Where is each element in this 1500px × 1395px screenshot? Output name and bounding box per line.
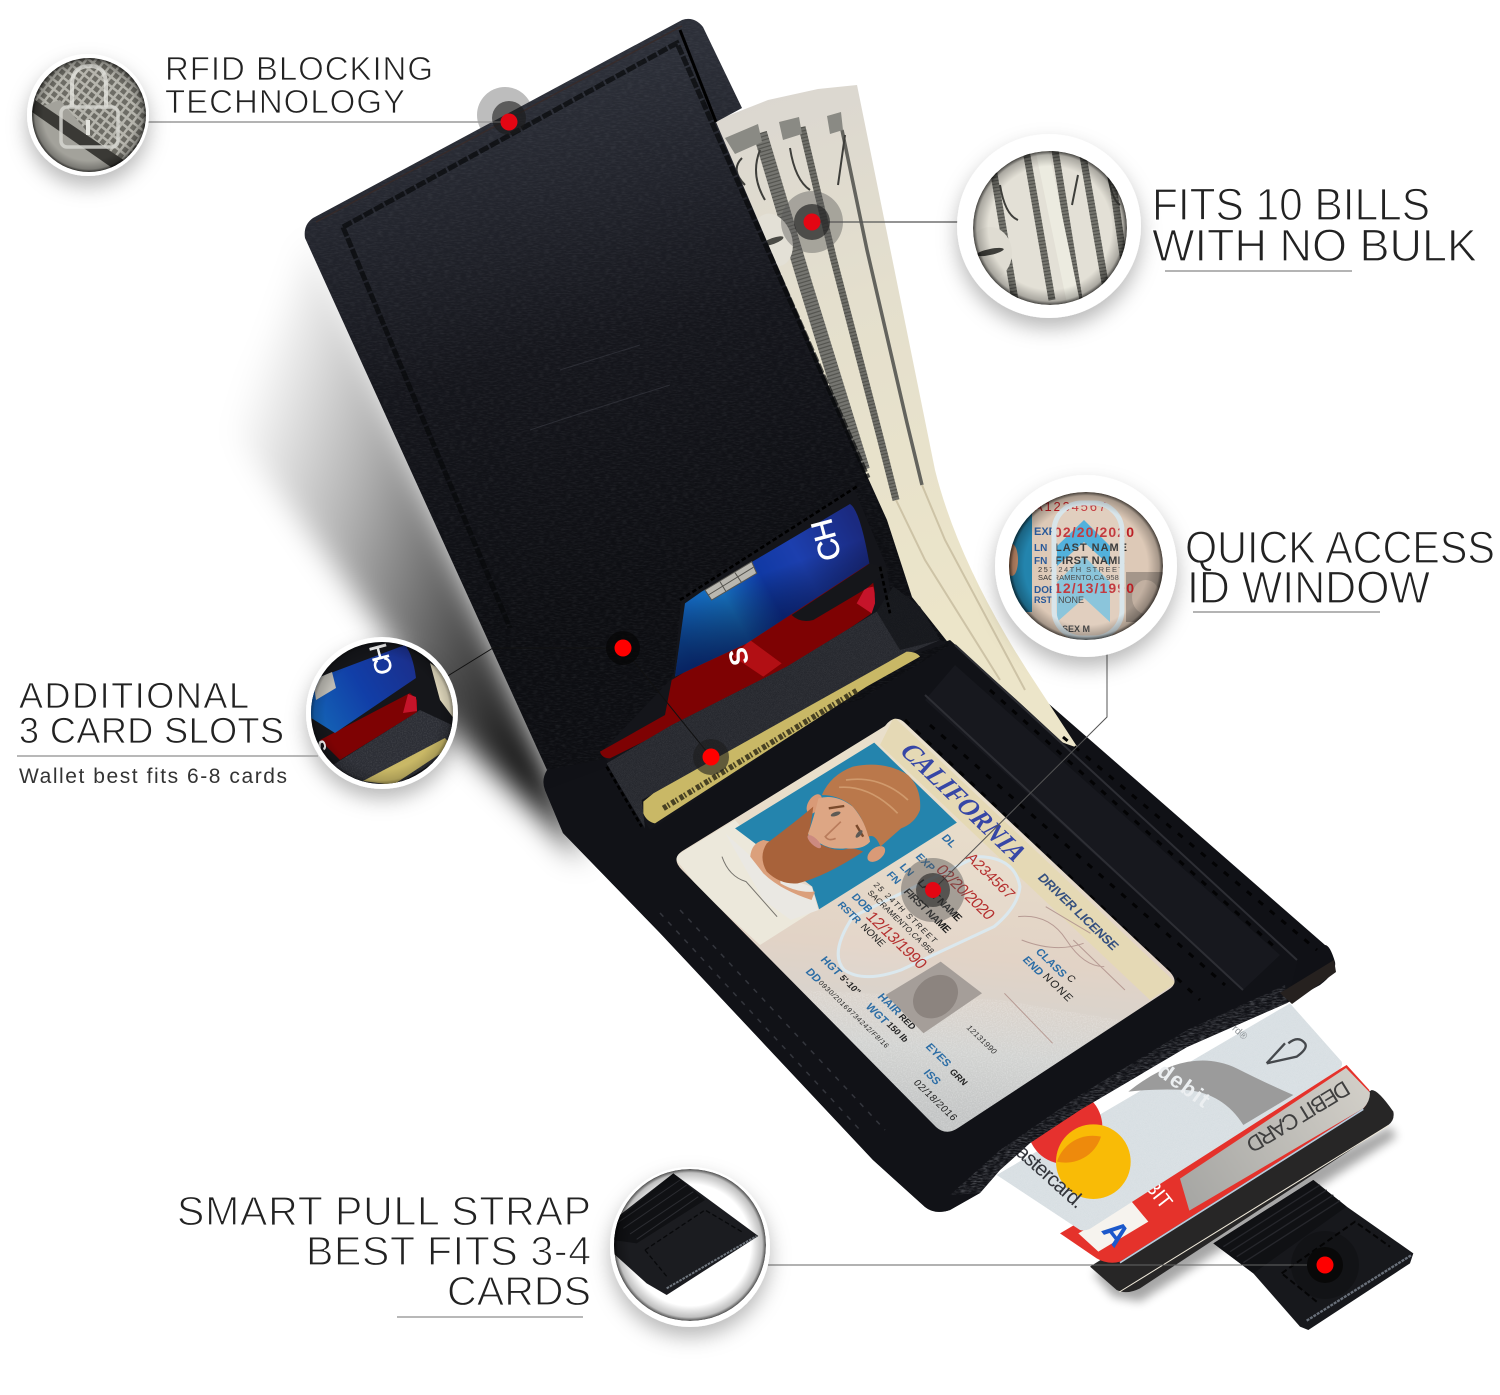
circle: ID window close-up: FN: [1034, 556, 1047, 567]
clear pull-tab outline: [838, 857, 1020, 977]
red card: S: [722, 644, 755, 669]
ID text: [803, 738, 1122, 1123]
circle: card slots close-up: S: [310, 738, 331, 754]
California ID card: [676, 718, 1174, 1132]
ID text: LAST NAME: [915, 878, 965, 924]
front panel with pockets: [545, 640, 1298, 1212]
ID text: DRIVER LICENSE: [1035, 871, 1122, 953]
ID text: FIRST NAME: [901, 887, 953, 935]
heading: pull strap: BEST FITS 3-4: [306, 1228, 591, 1274]
heading: RFID: TECHNOLOGY: [165, 83, 405, 120]
mastercard debit card: rd®: [1230, 1023, 1250, 1043]
heading: RFID: RFID BLOCKING: [165, 50, 433, 87]
circle: card slots close-up: CH: [365, 641, 399, 677]
stitched bottom-left edge: [660, 910, 885, 1130]
subtext: card slots: Wallet best fits 6-8 cards: [19, 765, 287, 788]
circle: ID window close-up: 12/13/1990: [1054, 580, 1134, 596]
strap: [1213, 1180, 1413, 1330]
heading: ID window: [1185, 522, 1495, 613]
marker: card slots flap: [606, 631, 640, 665]
ID text: FN: [884, 870, 903, 887]
ID text: 25 24TH STREET: [871, 881, 939, 945]
ID text: 12/13/1990: [862, 909, 930, 972]
circle: ID window close-up: EXP: [1034, 526, 1056, 538]
circle: ID window close-up: LAST NAME: [1055, 542, 1127, 554]
circle: ID window close-up: SEX M: [1062, 624, 1090, 634]
heading: pull strap: CARDS: [447, 1268, 591, 1314]
circle: ID window close-up: RST: [1034, 595, 1053, 605]
heading: card slots: 3 CARD SLOTS: [19, 710, 284, 751]
pocket lip over red card: [792, 563, 890, 621]
ID text: RSTR: [835, 900, 864, 926]
ID underline: [1193, 611, 1380, 613]
red and silver debit card: A: [1095, 1213, 1138, 1253]
lower panel base: [543, 643, 1335, 1212]
ID text: DOB: [849, 892, 875, 915]
ID text: SACRAMENTO,CA 958: [865, 889, 936, 956]
ID text: GRN: [947, 1067, 970, 1087]
ID callout line: [933, 640, 1107, 890]
heading: bills: WITH NO BULK: [1152, 220, 1477, 271]
ID text: CLASS: [1033, 947, 1069, 980]
ID text: NONE: [858, 922, 888, 949]
wallet cast shadow: [225, 235, 582, 860]
heading: bills: FITS 10 BILLS: [1152, 179, 1430, 230]
topographic tracery: [1004, 907, 1125, 1043]
circle: ID window close-up: 02/20/2020: [1054, 524, 1134, 540]
ID text: RED: [896, 1012, 918, 1032]
RFID pointer halo: [477, 87, 533, 143]
red and silver debit card: BIT: [1140, 1176, 1177, 1214]
heading: pull strap: [177, 1188, 591, 1314]
ID text: WGT: [863, 1002, 891, 1027]
heading: card slots: ADDITIONAL: [19, 675, 249, 716]
card drop shadow: [1093, 1127, 1397, 1302]
heading: card slots: [19, 675, 284, 751]
circle: ID window close-up: NONE: [1058, 595, 1084, 605]
circle: bills close-up: [957, 134, 1141, 318]
circle: ID window close-up: FIRST NAME: [1055, 555, 1125, 567]
circle: card slots close-up: [305, 635, 460, 795]
heading: pull strap: SMART PULL STRAP: [177, 1188, 591, 1234]
ID text: C: [1064, 973, 1078, 985]
ID text: END: [1020, 955, 1046, 978]
mastercard debit card: debit: [1153, 1058, 1215, 1113]
pull strap callout line: [768, 1264, 1325, 1266]
card slots underline: [17, 755, 318, 757]
ghost portrait: [886, 962, 982, 1033]
ID text: 0930/20169734242/F8/16: [816, 980, 890, 1050]
pull strap underline: [397, 1316, 583, 1318]
ID text: LN: [897, 862, 916, 879]
heading: ID window: ID WINDOW: [1187, 562, 1430, 613]
signature: [722, 857, 777, 917]
speckled lower area: [800, 990, 1120, 1135]
ID text: 150 lb: [884, 1020, 911, 1044]
flap seams: [343, 43, 868, 628]
card slots callout line: [446, 648, 711, 757]
red and silver debit card: [1060, 1065, 1370, 1263]
gold card: [643, 652, 920, 823]
glossy lower band: [950, 985, 1287, 1195]
marker: ID window: [901, 858, 965, 922]
dark tab corner: [1280, 960, 1336, 1004]
ID text: DD: [803, 967, 824, 985]
mastercard debit card: [997, 1003, 1342, 1230]
left pale panel: [674, 820, 815, 945]
leather stitches on card-slot flap: [607, 487, 890, 827]
ID text: EXP: [913, 852, 937, 873]
ID text: DL: [939, 833, 959, 850]
RFID callout line: [146, 121, 505, 123]
ID text: A234567: [962, 850, 1019, 902]
circle: ID window close-up: LN: [1034, 543, 1047, 554]
cream top edge: [880, 717, 1176, 1000]
circle: ID window close-up: 257 24TH STREET: [1038, 565, 1123, 574]
circle: ID window close-up: [995, 475, 1177, 657]
leather grain: [300, 15, 960, 775]
bills underline: [1165, 270, 1352, 272]
circle: ID window close-up: DOB: [1034, 585, 1056, 596]
ID text: EYES: [923, 1042, 953, 1069]
circle: RFID lock: [25, 54, 155, 185]
photo backdrop and portrait: [725, 743, 957, 920]
ID text: 02/20/2020: [932, 862, 998, 923]
marker: gold card slot: [693, 739, 729, 775]
ID text: HGT: [818, 955, 844, 978]
pull strap and cards sticking out of the wallet: [997, 1003, 1413, 1330]
ID background: [676, 718, 1174, 1132]
circle: pull strap close-up: [610, 1165, 770, 1330]
ID text: CALIFORNIA: [894, 738, 1033, 867]
red and silver debit card: DEBIT CARD: [1242, 1076, 1354, 1158]
ID text: NONE: [1040, 972, 1075, 1004]
marker: pull strap: [1291, 1231, 1359, 1299]
textured pocket leather: [607, 587, 940, 828]
ID text: 5'-10": [837, 973, 863, 996]
leather creases: [530, 345, 670, 430]
heading: RFID: [165, 50, 433, 120]
marker: RFID: [492, 101, 526, 135]
ID text: 12131990: [964, 1024, 999, 1056]
blue card: CH: [805, 515, 848, 564]
marker: bills: [781, 191, 843, 253]
ID text: 02/18/2016: [911, 1078, 959, 1123]
ID text: ISS: [921, 1068, 943, 1087]
ID text: HAIR: [875, 992, 904, 1017]
banknotes: [712, 85, 1078, 748]
card slots inside the wallet: [600, 487, 947, 830]
bills callout line: [812, 221, 975, 223]
heading: bills: [1152, 179, 1477, 271]
blue card: [675, 504, 869, 677]
mastercard debit card: mastercard.: [999, 1129, 1089, 1213]
upper flap: [305, 19, 950, 770]
wallet body: [300, 15, 1336, 1212]
black card: [1090, 1090, 1394, 1292]
red card: [600, 563, 875, 758]
circle: ID window close-up: A1234567: [1034, 499, 1106, 514]
circle: ID window close-up: SACRAMENTO,CA 9581: [1038, 573, 1123, 582]
slot recess: [600, 487, 947, 830]
